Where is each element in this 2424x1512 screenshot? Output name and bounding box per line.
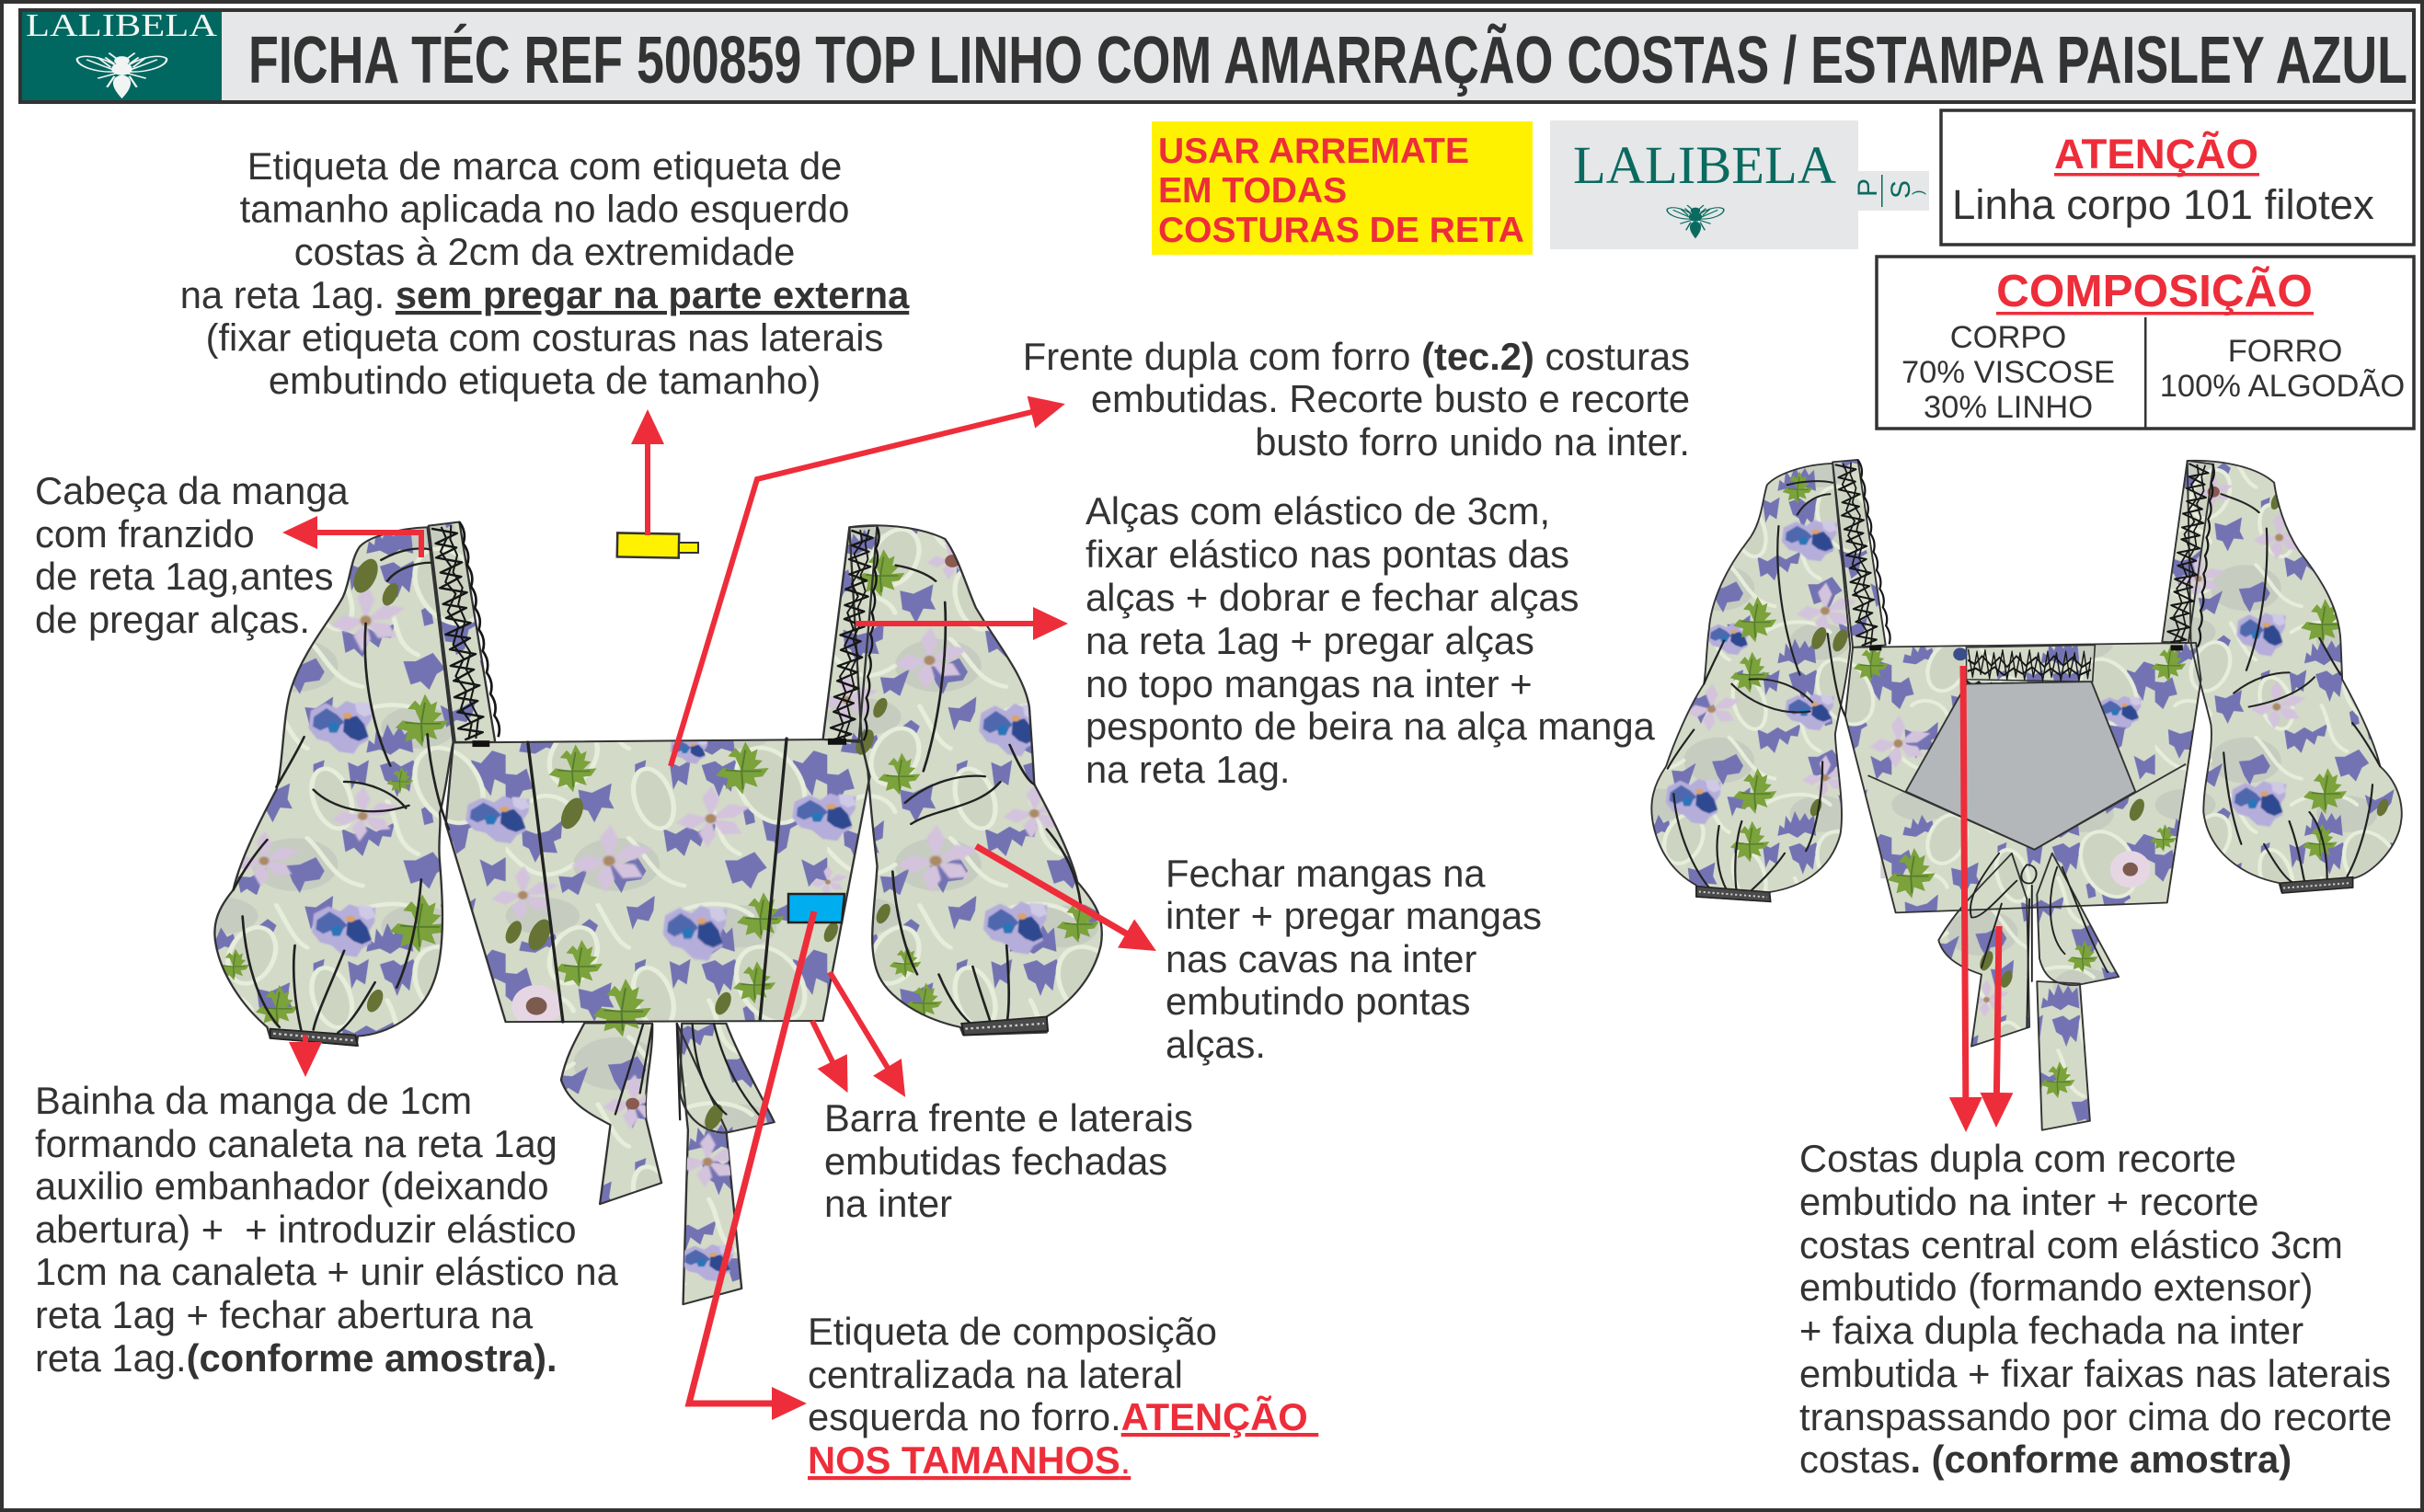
grey smudge: [1880, 844, 1890, 878]
garment: back view: [1651, 459, 2402, 1130]
right sleeve back: [2188, 461, 2402, 892]
tie front: [561, 1023, 775, 1304]
size tag P S: [1853, 171, 1929, 211]
arrow: brand label up: [645, 417, 650, 535]
text: brand label note: tamanho aplicada no lado esquerdo: [240, 188, 849, 231]
text: sleeve hem note: Bainha da manga de 1cm: [35, 1079, 472, 1122]
text: front note: [1023, 335, 1690, 464]
yellow callout: arremate: USAR ARREMATE: [1158, 132, 1469, 171]
yellow callout: arremate: EM TODAS: [1158, 171, 1347, 211]
text: sleeve head note: Cabeça da manga: [35, 469, 350, 512]
header bar: [20, 7, 2414, 102]
text: sleeve head note: com franzido: [35, 512, 255, 556]
floral print front: [218, 537, 1099, 1281]
tie folds front: [615, 1024, 764, 1119]
ruffled straps back: [1834, 459, 2224, 650]
text: sleeves note: [1166, 852, 1542, 1066]
text: sleeve head note: [35, 469, 350, 641]
sleeve gathers front: [234, 548, 1081, 1033]
text: back note: transpassando por cima do recorte: [1799, 1395, 2392, 1438]
floral print back: [1666, 472, 2391, 1098]
right sleeve front: [849, 525, 1102, 1035]
arrow: side hem: [830, 972, 902, 1091]
strap fills front: [429, 522, 878, 742]
text: sleeve head note: de pregar alças.: [35, 598, 310, 641]
text: composition label note: NOS TAMANHOS.: [808, 1438, 1131, 1482]
attention box: Linha corpo 101 filotex: [1952, 181, 2374, 228]
arrow: composition label: [689, 911, 814, 1403]
text: composition label note: centralizada na lateral: [808, 1353, 1183, 1396]
text: front note: embutidas. Recorte busto e recorte: [1091, 377, 1690, 420]
composition table: 30% LINHO: [1924, 390, 2093, 425]
text: brand label note: Etiqueta de marca com etiqueta de: [247, 144, 842, 188]
arrow: back seam one: [1963, 666, 1966, 1125]
tie back: [1938, 853, 2119, 1130]
arrow: front lining: [671, 406, 1058, 766]
arrow: cuff hem: [303, 1035, 308, 1070]
ruffled straps front: [431, 521, 890, 747]
arrow: sleeve head: [290, 533, 421, 557]
text: sleeve hem note: 1cm na canaleta + unir elástico na: [35, 1250, 619, 1293]
text: straps note: Alças com elástico de 3cm,: [1086, 489, 1550, 533]
body back: [1845, 643, 2201, 912]
text: composition label note: esquerda no forro.ATENÇÃO: [808, 1395, 1318, 1438]
cuffs front: [270, 1016, 1048, 1046]
size tag P S: S: [1886, 180, 1916, 199]
text: straps note: alças + dobrar e fechar alças: [1086, 576, 1579, 619]
arrow: straps: [856, 621, 1061, 626]
composition table: 70% VISCOSE: [1901, 355, 2115, 390]
text: brand label note: (fixar etiqueta com costuras nas laterais: [206, 316, 883, 359]
brand logo panel: LALIBELA: [1573, 135, 1836, 195]
garment: front view: [214, 521, 1102, 1304]
arrow: back seam two: [1996, 926, 1999, 1120]
front garment outlines: [214, 522, 1102, 1046]
text: back note: costas central com elástico 3cm: [1799, 1223, 2343, 1266]
text: front note: busto forro unido na inter.: [1255, 420, 1690, 464]
composition label: blue tag: [788, 894, 844, 922]
text: back note: embutida + fixar faixas nas laterais: [1799, 1352, 2391, 1395]
back garment outlines: [1651, 460, 2402, 1130]
text: straps note: [1086, 489, 1656, 791]
brand logo panel: [1550, 120, 1858, 249]
yellow callout: arremate: COSTURAS DE RETA: [1158, 211, 1524, 250]
text: straps note: na reta 1ag + pregar alças: [1086, 619, 1534, 662]
text: composition label note: [808, 1310, 1318, 1482]
text: front note: Frente dupla com forro (tec.2) costuras: [1023, 335, 1690, 378]
text: back note: [1799, 1137, 2392, 1481]
text: sleeves note: inter + pregar mangas: [1166, 894, 1542, 937]
text: back note: embutido (formando extensor): [1799, 1266, 2313, 1309]
text: sleeves note: Fechar mangas na: [1166, 852, 1486, 895]
composition table: CORPO: [1950, 320, 2066, 355]
size tag P S: P: [1853, 178, 1883, 197]
text: brand label note: costas à 2cm da extremidade: [294, 230, 795, 273]
text: sleeve head note: de reta 1ag,antes: [35, 555, 333, 598]
left sleeve front: [214, 527, 454, 1046]
sleeve gathers back: [1668, 481, 2380, 892]
text: brand label note: embutindo etiqueta de tamanho): [269, 359, 821, 402]
tie knot and folds back: [1970, 853, 2108, 1027]
text: brand label note: [180, 144, 910, 402]
text: brand label note: na reta 1ag. sem pregar na parte externa: [180, 273, 910, 316]
composition table: [1877, 257, 2414, 429]
text: straps note: no topo mangas na inter +: [1086, 662, 1533, 705]
text: hem note: [824, 1096, 1193, 1225]
text: straps note: pesponto de beira na alça manga: [1086, 704, 1656, 748]
text: hem note: Barra frente e laterais: [824, 1096, 1193, 1140]
text: sleeves note: nas cavas na inter: [1166, 937, 1476, 980]
cuffs back: [1696, 877, 2353, 901]
attention box: ATENÇÃO: [2054, 131, 2258, 178]
back neck band: [1953, 645, 2095, 697]
text: sleeve hem note: formando canaleta na reta 1ag: [35, 1122, 557, 1165]
size tag P S: ): [1911, 190, 1926, 195]
text: back note: + faixa dupla fechada na inter: [1799, 1309, 2303, 1352]
header logo: [22, 7, 222, 100]
text: sleeve hem note: abertura) + + introduzir elástico: [35, 1208, 577, 1251]
composition table: FORRO: [2228, 334, 2342, 369]
text: sleeve hem note: reta 1ag.(conforme amostra).: [35, 1336, 557, 1380]
text: back note: embutido na inter + recorte: [1799, 1180, 2258, 1223]
text: sleeve hem note: auxilio embanhador (deixando: [35, 1164, 549, 1208]
header logo: LALIBELA: [26, 7, 218, 43]
yellow callout: arremate: [1152, 121, 1533, 255]
arrow: sleeves: [976, 846, 1150, 947]
text: sleeve hem note: [35, 1079, 619, 1380]
text: straps note: fixar elástico nas pontas das: [1086, 533, 1569, 576]
attention box: [1941, 110, 2414, 245]
composition table: 100% ALGODÃO: [2160, 368, 2405, 404]
body front: [446, 739, 869, 1022]
text: hem note: na inter: [824, 1182, 952, 1225]
arrow: front hem: [812, 1021, 844, 1086]
body seams: [528, 739, 787, 1022]
text: hem note: embutidas fechadas: [824, 1140, 1167, 1183]
back panel: grey cut-out: [1906, 682, 2135, 850]
text: straps note: na reta 1ag.: [1086, 748, 1291, 791]
text: sleeves note: embutindo pontas: [1166, 979, 1470, 1023]
brand label: yellow tag: [617, 533, 698, 558]
text: back note: costas. (conforme amostra): [1799, 1438, 2292, 1481]
text: back note: Costas dupla com recorte: [1799, 1137, 2236, 1180]
composition table: COMPOSIÇÃO: [1996, 265, 2313, 316]
left sleeve back: [1651, 464, 1850, 901]
strap fills back: [1832, 460, 2213, 647]
text: sleeve hem note: reta 1ag + fechar abertura na: [35, 1293, 534, 1336]
text: sleeves note: alças.: [1166, 1023, 1266, 1066]
text: composition label note: Etiqueta de composição: [808, 1310, 1217, 1353]
